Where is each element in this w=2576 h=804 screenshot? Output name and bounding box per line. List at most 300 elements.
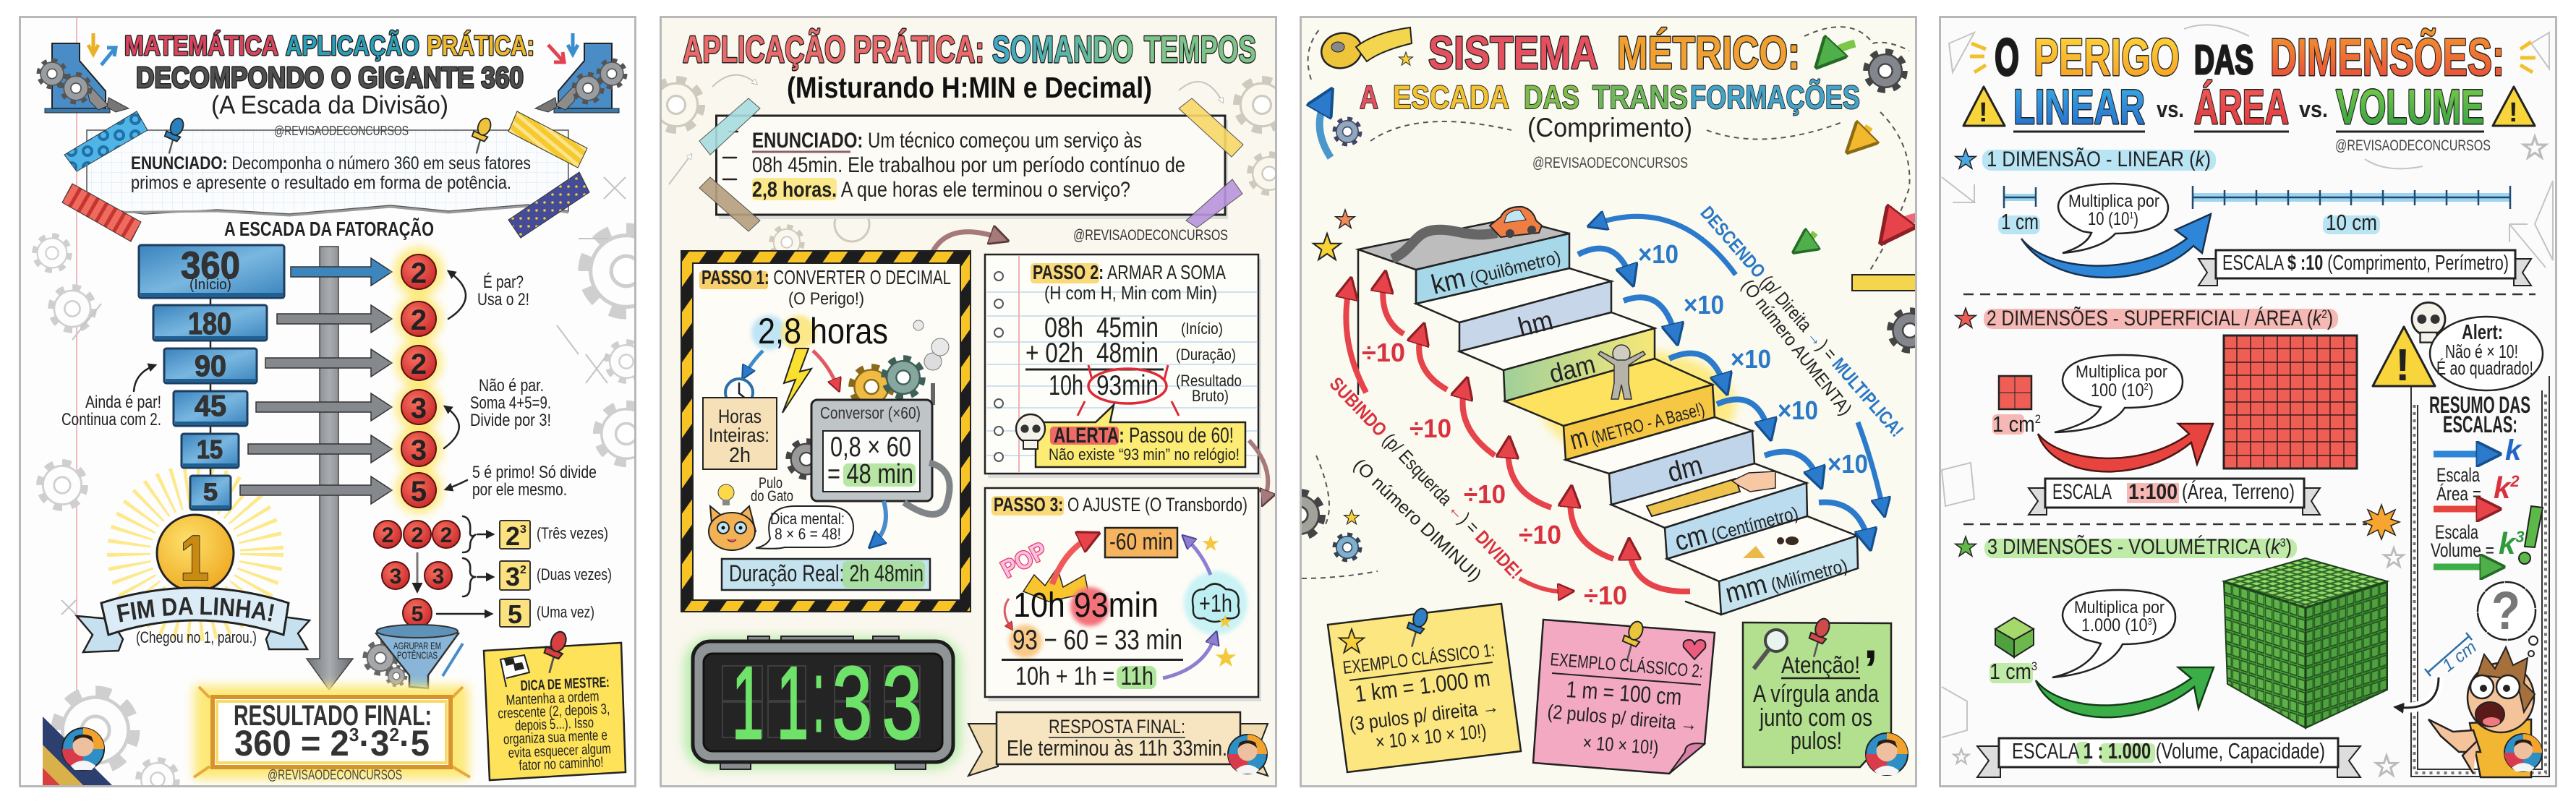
metric staircase bbox=[1358, 207, 1858, 615]
bubble dica mental bbox=[756, 506, 853, 549]
bubble: multiplica por 10: 1 bbox=[2129, 210, 2133, 221]
grouped powers: 3 bbox=[432, 565, 444, 589]
surprised character bbox=[2428, 647, 2535, 777]
sticky note: atenção bbox=[1743, 612, 1891, 767]
heading 3: ) bbox=[2286, 535, 2292, 559]
big cube of 1000 units bbox=[2224, 558, 2387, 728]
double frame bbox=[2411, 376, 2549, 777]
panel background bbox=[660, 16, 1277, 787]
title bbox=[1360, 27, 1860, 142]
banner: escala 1:100: (Área, Terreno) bbox=[2182, 480, 2295, 504]
skull icon bbox=[2412, 302, 2445, 343]
panel: passo 3 bbox=[985, 488, 1261, 701]
banner: resposta final: Ele terminou às 11h 33min. bbox=[1007, 735, 1227, 761]
red arrow bbox=[2038, 424, 2213, 471]
sticky note: dica de mestre: depois 5...). Isso bbox=[515, 715, 594, 735]
sticky note: exemplo 1 bbox=[1328, 604, 1521, 772]
horas inteiras box: Horas bbox=[718, 406, 762, 427]
side annotations: por ele mesmo. bbox=[472, 480, 567, 500]
banner: escala 1:1000 bbox=[1977, 738, 2360, 777]
handle: @REVISAODECONCURSOS bbox=[1532, 155, 1688, 171]
decor gears, stars, arrows bbox=[1278, 43, 1929, 560]
heading 2: 2 DIMENSÕES - SUPERFICIAL / ÁREA (k bbox=[1987, 307, 2385, 330]
grouped powers: 5 bbox=[508, 599, 522, 629]
banner: escala 1:1000: ESCALA 1 : 1.000 (Volume, Capacidade) bbox=[2012, 738, 2325, 764]
alert bubble: Não é × 10! bbox=[2445, 341, 2518, 362]
handle bottom: @REVISAODECONCURSOS bbox=[268, 768, 402, 783]
panel background bbox=[19, 16, 636, 787]
alert bubble bbox=[2430, 317, 2543, 390]
red prime circles: 2 bbox=[411, 257, 427, 289]
blue plates with numbers: 90 bbox=[195, 349, 226, 382]
enunciado box bbox=[716, 116, 1228, 219]
bulb and pulo do gato: do Gato bbox=[751, 488, 793, 505]
handle: @REVISAODECONCURSOS bbox=[274, 124, 409, 138]
bubble dica mental: 8 × 6 = 48! bbox=[775, 525, 841, 543]
title: PERIGO bbox=[2034, 29, 2180, 87]
section: 2 dimensões bbox=[1956, 306, 2357, 515]
+1h cloud: +1h bbox=[1199, 590, 1232, 617]
horas inteiras box bbox=[703, 398, 777, 469]
icon: measuring tape bbox=[1318, 27, 1412, 72]
washi tapes bbox=[699, 98, 1243, 231]
blue plates with numbers: 360 bbox=[181, 244, 240, 287]
bubble: multiplica por 100: 100 (10 bbox=[2091, 380, 2152, 401]
sticky note: exemplo 1: 1 km = 1.000 m bbox=[1353, 664, 1491, 707]
alert warning triangle bbox=[2373, 327, 2435, 390]
label 1 cm³: 1 cm bbox=[1989, 659, 2038, 684]
title: TRANS bbox=[1592, 79, 1688, 116]
enunciado note bbox=[87, 130, 568, 215]
grouped powers: (Duas vezes) bbox=[537, 565, 612, 583]
thought bubble bbox=[2478, 581, 2538, 657]
1 cm segment bbox=[1998, 186, 2040, 234]
step labels: m (METRO - A Base!) bbox=[1566, 391, 1707, 456]
side annotations: Continua com 2. bbox=[61, 410, 161, 429]
sticky note: atenção: , bbox=[1864, 612, 1877, 669]
bubble: multiplica por 1000: 1.000 (10 bbox=[2081, 615, 2158, 636]
digital clock: 1 bbox=[732, 646, 764, 761]
÷10 labels: ÷10 bbox=[1362, 338, 1405, 367]
soma bbox=[1025, 312, 1242, 416]
sticky note: dica de mestre: organiza sua mente e bbox=[503, 727, 607, 748]
result box: 3 bbox=[349, 724, 359, 745]
soma: + 02h bbox=[1025, 338, 1083, 369]
side annotations: É par? bbox=[483, 273, 524, 292]
bubble: multiplica por 1000: 3 bbox=[2148, 616, 2152, 627]
road and car bbox=[1392, 207, 1542, 259]
×10 labels: ×10 bbox=[1778, 395, 1818, 425]
green arrow bbox=[2036, 667, 2214, 717]
background sketch gears bbox=[35, 177, 666, 798]
banner: fim da linha: (Chegou no 1, parou.) bbox=[136, 628, 257, 646]
section: 1 dimensão bbox=[1956, 147, 2531, 286]
duração real box: Duração Real: 2h 48min bbox=[729, 560, 924, 586]
scale volume: k bbox=[2499, 526, 2515, 560]
warning triangles: ! bbox=[1979, 98, 1988, 128]
pop burst and arrow bbox=[997, 536, 1092, 602]
digital clock: : bbox=[813, 638, 824, 753]
sticky note: dica de mestre: Mantenha a ordem bbox=[506, 688, 600, 709]
cat bbox=[709, 506, 756, 550]
sticky note: exemplo 2: × 10 × 10!) bbox=[1582, 732, 1659, 758]
passo 2 heading bbox=[1031, 261, 1226, 304]
step labels: mm (Milímetro) bbox=[1722, 548, 1850, 610]
soma: 48min bbox=[1096, 338, 1159, 369]
grouped powers: (Uma vez) bbox=[537, 603, 594, 621]
digital clock: 1 bbox=[777, 646, 809, 761]
×10 labels bbox=[1638, 239, 1868, 479]
title: O bbox=[1995, 29, 2019, 87]
bulb and pulo do gato bbox=[718, 475, 793, 505]
red prime circles: 2 bbox=[411, 348, 427, 380]
gears and smoke bbox=[789, 320, 949, 476]
result box: ·3 bbox=[359, 723, 389, 764]
arrow: passo 2 to passo 3 bbox=[1249, 440, 1268, 500]
passo 1 heading: (O Perigo!) bbox=[788, 289, 864, 309]
enunciado note: primos e apresente o resultado em forma de potência. bbox=[131, 173, 511, 193]
grouped powers: 2 bbox=[520, 564, 526, 576]
bubble: multiplica por 1000 bbox=[2052, 590, 2175, 677]
label 1 cm²: 1 cm bbox=[1992, 411, 2041, 437]
warning triangles bbox=[1963, 87, 2535, 128]
red ÷10 arrows bbox=[1346, 279, 1690, 591]
warning triangles: ! bbox=[2509, 98, 2518, 128]
funnel: agrupar em potências bbox=[366, 625, 463, 688]
bulb and pulo do gato: Pulo bbox=[759, 475, 782, 492]
grouped powers: (Três vezes) bbox=[537, 524, 608, 542]
alert bubble: É ao quadrado! bbox=[2436, 357, 2533, 379]
section: 3 dimensões bbox=[1956, 534, 2387, 777]
panel: passo 1 bbox=[681, 251, 971, 612]
scale volume: 3 bbox=[2515, 528, 2525, 546]
-60 min tag: -60 min bbox=[1109, 529, 1173, 555]
title: DECOMPONDO O GIGANTE 360 bbox=[136, 61, 524, 94]
red prime circles: 5 bbox=[411, 476, 427, 508]
scale volume: Escala bbox=[2435, 521, 2479, 543]
banner: resposta final: RESPOSTA FINAL: bbox=[1049, 716, 1185, 737]
÷10 labels: ÷10 bbox=[1584, 581, 1627, 610]
small cube bbox=[1995, 617, 2034, 657]
banner: escala 1:10 bbox=[2198, 250, 2531, 286]
digital clock: 3 bbox=[832, 646, 872, 761]
gold coin with rays bbox=[129, 487, 262, 620]
title: (A Escada da Divisão) bbox=[211, 91, 448, 119]
blue plates with numbers: 180 bbox=[188, 307, 231, 341]
10h 93min: 10h 93min bbox=[1013, 586, 1159, 625]
sticky note: atenção: Atenção! bbox=[1781, 651, 1860, 678]
blue arrow bbox=[2021, 214, 2211, 278]
result box: 360 = 2 bbox=[234, 723, 356, 764]
red prime circles: 3 bbox=[411, 435, 427, 466]
alert bubble: Alert: bbox=[2462, 321, 2503, 344]
step labels: dm bbox=[1664, 450, 1706, 489]
panel: somando tempos bbox=[652, 16, 1287, 787]
side annotations: Divide por 3! bbox=[470, 411, 551, 430]
title: MÉTRICO: bbox=[1617, 27, 1800, 79]
banner: fim da linha: FIM DA LINHA! bbox=[117, 597, 274, 622]
converter machine: 0,8 × 60 bbox=[830, 432, 911, 463]
blue plates with numbers: 5 bbox=[203, 479, 218, 506]
scale area: 2 bbox=[2509, 472, 2520, 490]
title rays bbox=[1970, 42, 2536, 72]
passo 1 heading bbox=[699, 270, 950, 308]
scale k bbox=[2434, 435, 2522, 466]
red prime circles: 3 bbox=[411, 393, 427, 424]
resumo heading bbox=[2429, 392, 2530, 437]
side annotations: Não é par. bbox=[479, 376, 544, 395]
treads bbox=[1358, 218, 1857, 581]
sticky note: atenção: pulos! bbox=[1791, 727, 1842, 755]
10 cm ruler bbox=[2193, 186, 2510, 235]
title: vs. bbox=[2157, 96, 2184, 122]
converter machine: = 48 min bbox=[827, 459, 913, 489]
heading 1: 1 DIMENSÃO - LINEAR (k) bbox=[1987, 147, 2211, 171]
title bbox=[124, 30, 534, 119]
descendo text: (O número AUMENTA) bbox=[1737, 275, 1856, 419]
sticky note: exemplo 1: × 10 × 10 × 10!) bbox=[1374, 720, 1488, 753]
horas inteiras box: Inteiras: bbox=[709, 424, 769, 446]
title: VOLUME bbox=[2336, 80, 2484, 134]
gold coin with rays: 1 bbox=[180, 522, 209, 594]
×10 labels: ×10 bbox=[1731, 344, 1771, 374]
÷10 labels: ÷10 bbox=[1464, 479, 1506, 509]
result box: RESULTADO FINAL: bbox=[234, 700, 432, 732]
panel background bbox=[1300, 16, 1917, 787]
passo 1 heading: PASSO 1: CONVERTER O DECIMAL bbox=[701, 266, 951, 288]
sticky note: exemplo 1: EXEMPLO CLÁSSICO 1: bbox=[1342, 639, 1496, 678]
÷10 labels bbox=[1362, 338, 1627, 610]
title: FORMAÇÕES bbox=[1690, 79, 1860, 116]
grouped powers: 3 bbox=[520, 523, 526, 536]
step labels: cm (Centímetro) bbox=[1671, 495, 1801, 557]
converter machine: Conversor (×60) bbox=[820, 403, 921, 422]
×10 labels: ×10 bbox=[1827, 449, 1868, 479]
side annotations: Usa o 2! bbox=[477, 290, 529, 309]
÷10 labels: ÷10 bbox=[1519, 520, 1561, 549]
lightning and arrows bbox=[745, 348, 837, 413]
title: A bbox=[1360, 79, 1378, 116]
subtraction: 93 − 60 = 33 min bbox=[1012, 625, 1182, 656]
diagonal 1 cm measure: 1 cm bbox=[2439, 637, 2481, 676]
funnel: agrupar em potências: POTÊNCIAS bbox=[397, 649, 438, 661]
washi tapes bbox=[62, 111, 589, 241]
avatar bbox=[1866, 733, 1908, 775]
blue plates with numbers: 15 bbox=[197, 435, 223, 464]
grouped powers bbox=[374, 516, 612, 629]
panel: passo 2 bbox=[985, 255, 1268, 500]
side panel: resumo das escalas bbox=[2373, 302, 2549, 777]
sticky note: exemplo 2: (2 pulos p/ direita → bbox=[1546, 701, 1698, 735]
soma: (Início) bbox=[1181, 320, 1223, 338]
digital clock: 3 bbox=[882, 646, 922, 761]
title: (Comprimento) bbox=[1527, 113, 1692, 142]
notebook page bbox=[985, 255, 1261, 478]
sticky note: dica de mestre: crescente (2, depois 3, bbox=[498, 701, 610, 722]
handle: @REVISAODECONCURSOS bbox=[2335, 137, 2491, 154]
title: APLICAÇÃO bbox=[286, 30, 419, 61]
title: LINEAR bbox=[2013, 80, 2145, 134]
scale area bbox=[2434, 464, 2520, 509]
step labels: hm bbox=[1515, 305, 1556, 343]
title: ESCADA bbox=[1393, 79, 1509, 116]
passo 2 heading: (H com H, Min com Min) bbox=[1044, 282, 1217, 304]
bubble: multiplica por 100: ) bbox=[2149, 380, 2154, 401]
enunciado note: ENUNCIADO: Decomponha o número 360 em seus fatores bbox=[131, 153, 531, 174]
central vertical arrow bbox=[307, 247, 353, 690]
diagonal 1 cm measure bbox=[2425, 633, 2481, 676]
sticky note: dica de mestre: fator no caminho! bbox=[519, 754, 604, 774]
title bbox=[1995, 28, 2504, 134]
small square bbox=[1999, 376, 2031, 409]
person on dam step bbox=[1598, 345, 1645, 399]
panel: sistema métrico bbox=[1278, 16, 1929, 787]
label 1 cm²: 2 bbox=[2035, 412, 2041, 426]
banner: escala 1:100: ESCALA bbox=[2052, 480, 2112, 504]
grouped powers: 5 bbox=[411, 602, 423, 626]
blue plates with numbers bbox=[139, 244, 284, 510]
subindo text: (O número DIMINUI) bbox=[1349, 455, 1485, 586]
title: DAS bbox=[2194, 37, 2253, 83]
risers bbox=[1416, 234, 1858, 615]
title: MATEMÁTICA bbox=[124, 30, 278, 61]
scale area: k bbox=[2494, 471, 2510, 505]
decorative sketches bbox=[1942, 25, 2553, 775]
decorative dashed paths bbox=[1302, 27, 1909, 578]
×10 labels: ×10 bbox=[1684, 290, 1724, 320]
pins bbox=[165, 116, 493, 153]
blue ×10 arrows bbox=[1578, 216, 1883, 542]
side annotations: Ainda é par! bbox=[85, 393, 161, 412]
bubble: multiplica por 10 bbox=[2058, 184, 2168, 253]
result box: ·5 bbox=[399, 723, 430, 764]
bubble: multiplica por 10: ) bbox=[2133, 209, 2138, 229]
panel: perigo das dimensões bbox=[1939, 16, 2557, 787]
hazard frame bbox=[681, 251, 971, 612]
sticky note: dica de mestre bbox=[484, 630, 626, 780]
10x10 area grid bbox=[2224, 335, 2357, 469]
sticky note: exemplo 1: (3 pulos p/ direita → bbox=[1348, 696, 1500, 735]
bubble: multiplica por 1000: ) bbox=[2152, 615, 2157, 636]
sticky note: dica de mestre: DICA DE MESTRE: bbox=[520, 675, 610, 694]
bubble dica mental: Dica mental: bbox=[770, 510, 845, 528]
ladder connectors bbox=[210, 298, 211, 476]
heading 3: 3 DIMENSÕES - VOLUMÉTRICA (k bbox=[1987, 535, 2324, 559]
enunciado box: 2,8 horas. A que horas ele terminou o serviço? bbox=[752, 178, 1130, 202]
grouped powers: 3 bbox=[390, 565, 401, 589]
banner: escala 1:10: ESCALA $ :10 (Comprimento, Perímetro) bbox=[2222, 252, 2509, 275]
panel border bbox=[1940, 17, 2556, 787]
heading: A ESCADA DA FATORAÇÃO bbox=[224, 218, 434, 240]
pop burst and arrow: POP bbox=[997, 537, 1052, 583]
scale k: k bbox=[2505, 435, 2522, 466]
clock icon bbox=[724, 377, 754, 397]
sticky note: atenção: junto com os bbox=[1759, 704, 1872, 732]
bubble: multiplica por 10: Multiplica por bbox=[2068, 192, 2159, 211]
passo 3 heading: PASSO 3: O AJUSTE (O Transbordo) bbox=[994, 494, 1248, 516]
×10 labels: ×10 bbox=[1638, 239, 1679, 269]
duração real box bbox=[722, 559, 930, 590]
converter machine bbox=[811, 400, 950, 514]
panel border bbox=[20, 17, 635, 787]
heading 2: ) bbox=[2327, 307, 2333, 330]
subtraction bbox=[1002, 625, 1183, 659]
side annotations: 5 é primo! Só divide bbox=[472, 463, 597, 482]
horizontal arrows bbox=[240, 258, 392, 504]
icon: left machine bbox=[39, 33, 129, 113]
soma: 45min bbox=[1096, 312, 1159, 343]
burst icon bbox=[2363, 505, 2400, 539]
panel border bbox=[1300, 17, 1916, 787]
thought bubble: ? bbox=[2491, 581, 2520, 641]
title: vs. bbox=[2299, 96, 2328, 122]
scale area: Área = bbox=[2436, 483, 2481, 505]
banner: resposta final bbox=[968, 712, 1268, 776]
red prime circles: 2 bbox=[411, 304, 427, 336]
avatar bbox=[1228, 735, 1267, 774]
ruler and hand bbox=[1647, 471, 1775, 516]
panel background bbox=[1939, 16, 2557, 787]
+1h cloud bbox=[1184, 571, 1248, 635]
bubble: multiplica por 100: 2 bbox=[2144, 381, 2149, 392]
grouped powers: 2 bbox=[411, 523, 423, 547]
title: DAS bbox=[1524, 79, 1579, 116]
soma: (Resultado bbox=[1176, 372, 1242, 390]
frame bbox=[985, 488, 1261, 701]
title: SISTEMA bbox=[1428, 27, 1598, 79]
enunciado box: ENUNCIADO: Um técnico começou um serviço às bbox=[752, 129, 1142, 153]
alert box bbox=[1036, 405, 1245, 467]
panel border bbox=[661, 17, 1276, 787]
soma: (Duração) bbox=[1176, 346, 1236, 364]
sticky note: exemplo 2: EXEMPLO CLÁSSICO 2: bbox=[1550, 649, 1704, 682]
enunciado box: 08h 45min. Ele trabalhou por um período contínuo de bbox=[752, 153, 1185, 177]
1 cm segment: 1 cm bbox=[2001, 209, 2039, 234]
heading 2: 2 bbox=[2321, 307, 2327, 321]
blue plates with numbers: (Início) bbox=[189, 277, 231, 293]
alert box: Não existe “93 min” no relógio! bbox=[1049, 445, 1240, 463]
sticky note: exemplo 2 bbox=[1533, 620, 1715, 774]
side annotations: Soma 4+5=9. bbox=[470, 393, 551, 413]
funnel: agrupar em potências: AGRUPAR EM bbox=[393, 640, 441, 651]
scale area: Escala bbox=[2436, 464, 2481, 486]
10 cm ruler: 10 cm bbox=[2326, 210, 2377, 235]
step labels: km (Quilômetro) bbox=[1428, 239, 1564, 301]
grouped powers: 3 bbox=[506, 562, 520, 591]
digital clock bbox=[683, 636, 962, 770]
title: APLICAÇÃO PRÁTICA: bbox=[683, 28, 984, 71]
descendo text: DESCENDO (p/ Direita →) = MULTIPLICA! bbox=[1696, 202, 1908, 441]
banner: escala 1:100 bbox=[2029, 479, 2320, 515]
skull icon bbox=[1016, 414, 1045, 449]
bubble: multiplica por 1000: Multiplica por bbox=[2074, 598, 2165, 617]
step labels bbox=[1428, 239, 1850, 610]
soma: 08h bbox=[1044, 312, 1083, 343]
label 1 cm³: 3 bbox=[2031, 659, 2037, 673]
title: SOMANDO bbox=[992, 29, 1133, 71]
passo 2 heading: PASSO 2: ARMAR A SOMA bbox=[1033, 261, 1226, 283]
blue plates with numbers: 45 bbox=[195, 389, 226, 422]
subindo text: SUBINDO (p/ Esquerda ←) = DIVIDE! bbox=[1326, 372, 1527, 583]
avatar bbox=[2504, 734, 2542, 771]
big exclamation bbox=[2519, 506, 2543, 564]
resumo heading: ESCALAS: bbox=[2443, 411, 2517, 437]
title bbox=[683, 28, 1256, 104]
sticky note: dica de mestre: evita esquecer algum bbox=[508, 741, 611, 761]
ant and sand bbox=[1743, 536, 1799, 558]
step labels: dam bbox=[1546, 348, 1598, 389]
title: TEMPOS bbox=[1144, 29, 1256, 71]
